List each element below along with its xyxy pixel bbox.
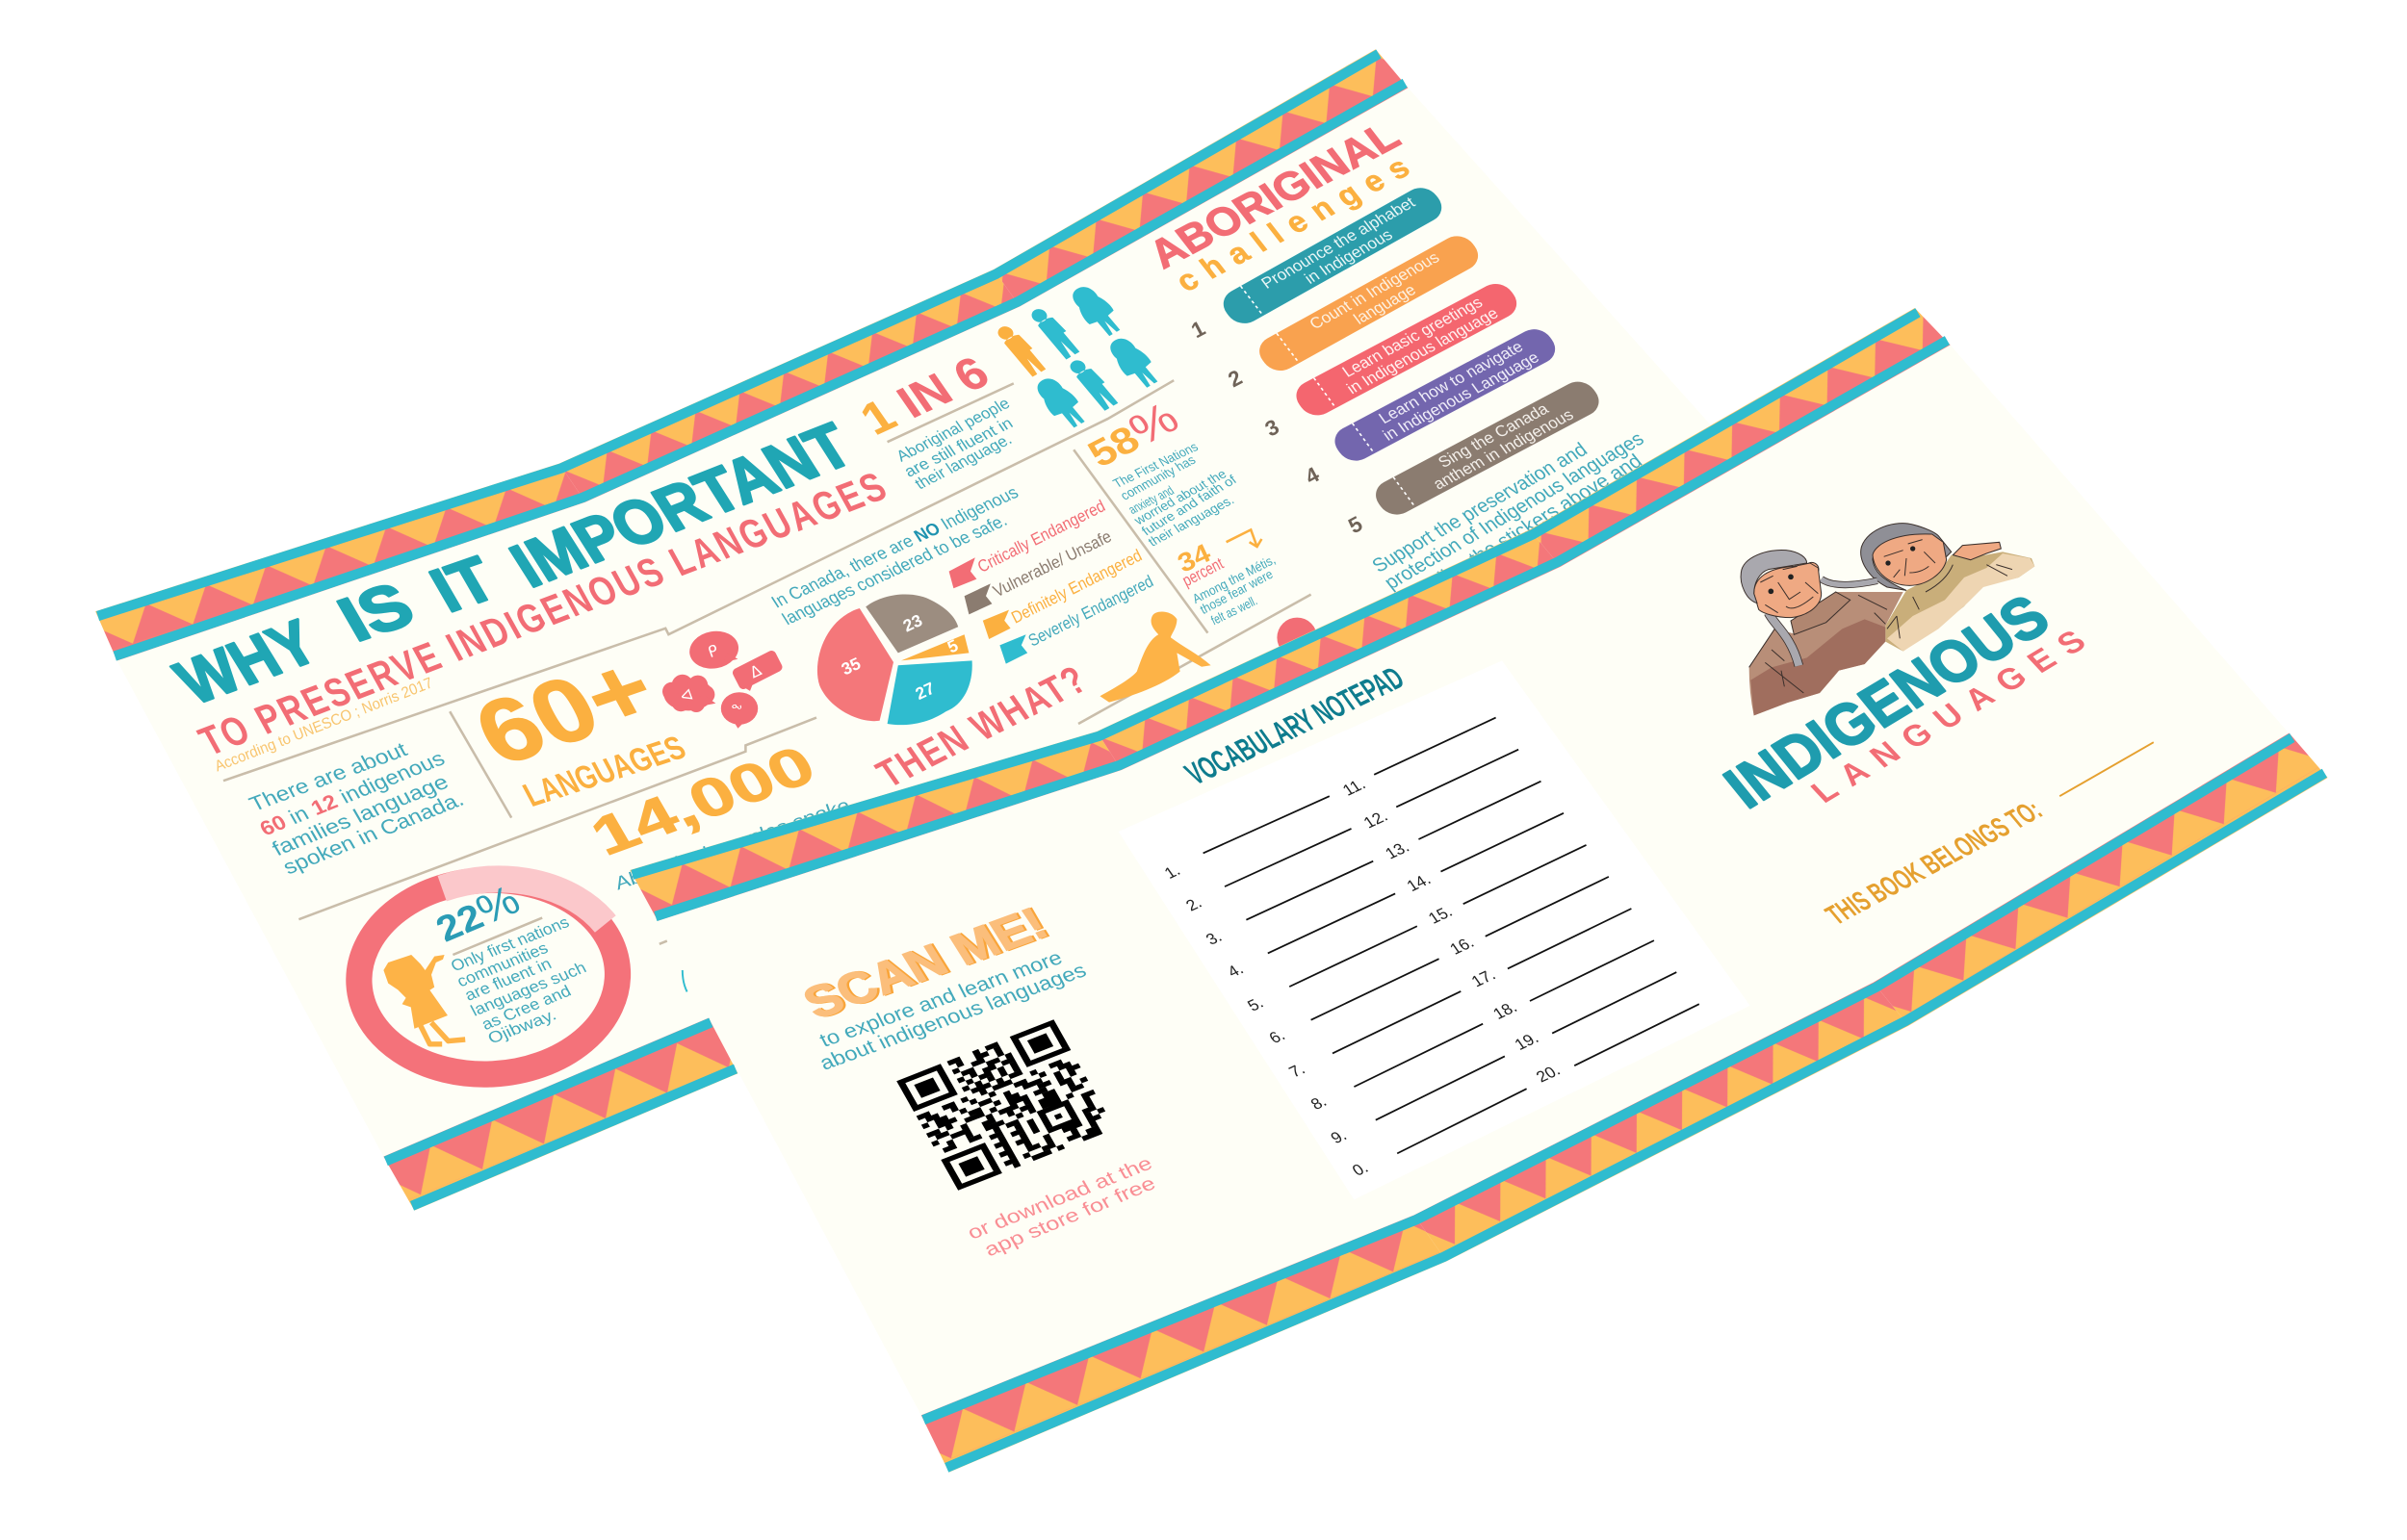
challenge numbers: 1 xyxy=(1187,316,1209,343)
line numbers: 6. xyxy=(1266,1026,1288,1047)
line numbers: 8. xyxy=(1307,1092,1330,1114)
icon: speech bubbles with syllabics: ᖕ xyxy=(730,701,746,720)
line numbers: 4. xyxy=(1224,960,1247,981)
front sheet: booklet xyxy=(630,308,2328,1473)
stat: 60+ languages: 60+ xyxy=(457,636,672,784)
line numbers: 16. xyxy=(1446,934,1477,958)
line numbers: 20. xyxy=(1533,1062,1564,1086)
cover title: LANGUAGES xyxy=(1804,624,2093,809)
line numbers: 13. xyxy=(1382,838,1412,862)
stat: 14,000: 14,000 xyxy=(581,734,826,867)
pie chart: endangerment: 5 xyxy=(945,635,961,656)
pie legend xyxy=(949,496,1156,664)
text: download: or download at the xyxy=(964,1153,1156,1244)
pie legend: Severely Endangered xyxy=(1025,572,1156,651)
stat: 1 in 6: Aboriginal people xyxy=(893,395,1013,465)
line numbers: 3. xyxy=(1203,928,1226,948)
text: download xyxy=(964,1153,1159,1261)
text: explore: to explore and learn more xyxy=(816,947,1066,1051)
text: language families: spoken in Canada. xyxy=(278,787,468,879)
icon: child silhouette xyxy=(383,955,465,1044)
source note: According to UNESCO ; Norris 2017 xyxy=(213,675,435,775)
heading: aboriginal challenges: challenges xyxy=(1169,150,1416,298)
stat: 60+ languages xyxy=(457,636,692,814)
text: language families: 60 in 12 indigenous xyxy=(255,746,449,840)
stat: 14,000 xyxy=(581,734,852,895)
stat: 58%: 58% xyxy=(1076,393,1188,476)
stat: 1 in 6 xyxy=(851,347,1017,493)
heading: then what: THEN WHAT? xyxy=(867,656,1096,796)
notepad heading: VOCABULARY NOTEPAD xyxy=(1178,660,1411,792)
pie legend: Critically Endangered xyxy=(974,496,1108,577)
title xyxy=(164,411,865,718)
heading: scan me: SCAN ME! xyxy=(796,899,1059,1029)
front top zigzag band xyxy=(630,308,1951,921)
stat: 58%: future and faith of xyxy=(1139,473,1239,538)
front bottom zigzag band xyxy=(921,733,2328,1473)
challenge numbers xyxy=(1187,316,1366,538)
line numbers: 11. xyxy=(1339,775,1369,799)
text: no safe languages: In Canada, there are NO Indigenous xyxy=(767,482,1022,611)
back top zigzag band xyxy=(95,49,1408,660)
line numbers: 17. xyxy=(1468,965,1499,990)
line numbers: 5. xyxy=(1244,994,1267,1014)
line numbers xyxy=(1161,775,1564,1179)
pie legend: Vulnerable/ Unsafe xyxy=(990,526,1114,601)
title: IS xyxy=(326,570,426,654)
donut chart: 22%: Only first nations xyxy=(448,913,572,975)
pie chart: endangerment: 35 xyxy=(839,654,864,679)
line numbers: 12. xyxy=(1360,808,1391,832)
stat: 1 in 6: 1 IN 6 xyxy=(851,347,998,445)
challenge pill 3: Learn basic greetings xyxy=(1338,294,1486,381)
text: explore: about indigenous languages xyxy=(816,960,1090,1074)
stat: 34 percent: felt as well. xyxy=(1209,593,1259,628)
icon: speech bubbles with syllabics: ᐃ xyxy=(748,662,764,681)
stat: 58%: The First Nations xyxy=(1110,440,1201,491)
icon: speech bubbles with syllabics xyxy=(662,628,786,729)
challenge numbers: 3 xyxy=(1261,415,1283,442)
line numbers: 2. xyxy=(1182,894,1205,914)
cover title: INDIGENOUS xyxy=(1712,582,2061,821)
challenge pill 2: Count in Indigenous xyxy=(1306,248,1443,333)
line numbers: 14. xyxy=(1404,870,1435,895)
subtitle: TO PRESERVE INDIGENOUS LANGUAGES xyxy=(192,464,896,764)
challenge pill 4: Learn how to navigate xyxy=(1375,338,1527,427)
line numbers: 18. xyxy=(1489,998,1520,1023)
text: support preservation: protection of Indigenous languages xyxy=(1381,428,1648,594)
back sheet: infographic xyxy=(95,49,1772,1211)
challenge pill 5: anthem in Indigenous xyxy=(1430,405,1577,493)
title: IT xyxy=(419,545,508,626)
title: IMPORTANT xyxy=(499,411,865,601)
challenge pill 1 xyxy=(1216,182,1449,329)
icon: sitting figure xyxy=(1100,612,1211,703)
challenge pill 2: language xyxy=(1350,281,1419,328)
text: language families xyxy=(245,737,468,879)
challenge pill 1: Pronounce the alphabet xyxy=(1257,193,1419,293)
challenge pill 3 xyxy=(1289,278,1523,421)
QR code xyxy=(897,1021,1114,1189)
front sheet paper xyxy=(630,308,2328,1473)
stat: 34 percent xyxy=(1173,529,1278,628)
challenge pill 4 xyxy=(1328,323,1562,467)
donut chart: 22% xyxy=(354,874,623,1081)
coral circle, partly hidden xyxy=(1277,618,1317,657)
donut chart: 22%: Ojibway. xyxy=(485,1006,559,1047)
text: support preservation: Support the preservation and xyxy=(1368,439,1592,577)
writing lines xyxy=(1204,718,1699,1153)
icon: six people xyxy=(995,281,1165,432)
back sheet paper xyxy=(95,49,1772,1211)
line numbers: 15. xyxy=(1425,903,1456,927)
text: download: app store for free xyxy=(981,1173,1159,1261)
back bottom zigzag band xyxy=(383,1018,738,1211)
heading: scan me: SCAN ME! xyxy=(794,899,1056,1029)
line numbers: 1. xyxy=(1161,861,1183,883)
text: language families: families language xyxy=(268,770,453,860)
ownership line: THIS BOOK BELONGS TO: xyxy=(1819,794,2049,931)
title: WHY xyxy=(164,607,330,718)
donut chart: 22%: are fluent in xyxy=(461,955,555,1005)
stat: 34 percent: percent xyxy=(1179,553,1227,590)
donut chart: 22%: 22% xyxy=(427,877,528,951)
icon: speech bubbles with syllabics: ᑭ xyxy=(706,643,720,661)
line numbers: 0. xyxy=(1349,1159,1372,1179)
pie chart: endangerment: 23 xyxy=(900,610,925,636)
challenge pill 2 xyxy=(1253,230,1485,376)
donut chart: 22%: languages such xyxy=(468,959,589,1020)
line numbers: 7. xyxy=(1285,1060,1308,1081)
line numbers: 9. xyxy=(1328,1126,1350,1147)
stat: 58%: worried about the xyxy=(1130,467,1229,527)
stat: 58%: community has xyxy=(1118,452,1199,502)
icon: arrow xyxy=(1227,529,1261,547)
line numbers: 19. xyxy=(1512,1029,1542,1054)
right figure xyxy=(1861,524,2034,652)
stat: 60+ languages: LANGUAGES xyxy=(517,729,692,814)
stat: 1 in 6: are still fluent in xyxy=(901,414,1017,480)
challenge pill 5 xyxy=(1369,376,1606,521)
stat: 58%: anxiety and xyxy=(1126,483,1177,517)
pie chart: endangerment: 27 xyxy=(913,678,938,704)
pie legend: Definitely Endangered xyxy=(1008,546,1145,628)
stat: 58% xyxy=(1076,393,1239,549)
pie chart: endangerment xyxy=(817,594,972,725)
stat: 34 percent: those fear were xyxy=(1198,567,1275,617)
text: language families: There are about xyxy=(245,737,411,816)
challenge pill 3: in Indigenous language xyxy=(1343,304,1502,398)
challenge pill 4: in Indigenous Language xyxy=(1380,348,1542,444)
challenge numbers: 2 xyxy=(1225,365,1246,392)
stat: 34 percent: 34 xyxy=(1173,537,1215,578)
challenge pill 1: in Indigenous xyxy=(1301,225,1396,288)
left figure xyxy=(1741,550,1903,715)
challenge numbers: 4 xyxy=(1302,462,1324,489)
challenge pill 5: Sing the Canada xyxy=(1435,399,1552,472)
text: no safe languages: languages considered to be safe. xyxy=(778,510,1011,629)
donut chart: 22%: as Cree and xyxy=(479,982,574,1034)
heading: aboriginal challenges: ABORIGINAL xyxy=(1141,114,1409,277)
donut chart: 22%: communities xyxy=(453,938,551,990)
challenge numbers: 5 xyxy=(1344,511,1366,538)
panel: vocabulary notepad xyxy=(1119,660,1750,1199)
stat: 58%: their languages. xyxy=(1146,493,1237,549)
stat: 1 in 6: their language. xyxy=(912,430,1015,493)
stat: 14,000: Aboriginal peoples spoke xyxy=(612,795,852,895)
stat: 34 percent: Among the Métis, xyxy=(1190,552,1278,606)
text: support preservation: including the stickers above and xyxy=(1394,450,1646,612)
icon: speech bubbles with syllabics: ᐊ xyxy=(679,687,695,706)
illustration: elderly couple xyxy=(1741,524,2034,715)
